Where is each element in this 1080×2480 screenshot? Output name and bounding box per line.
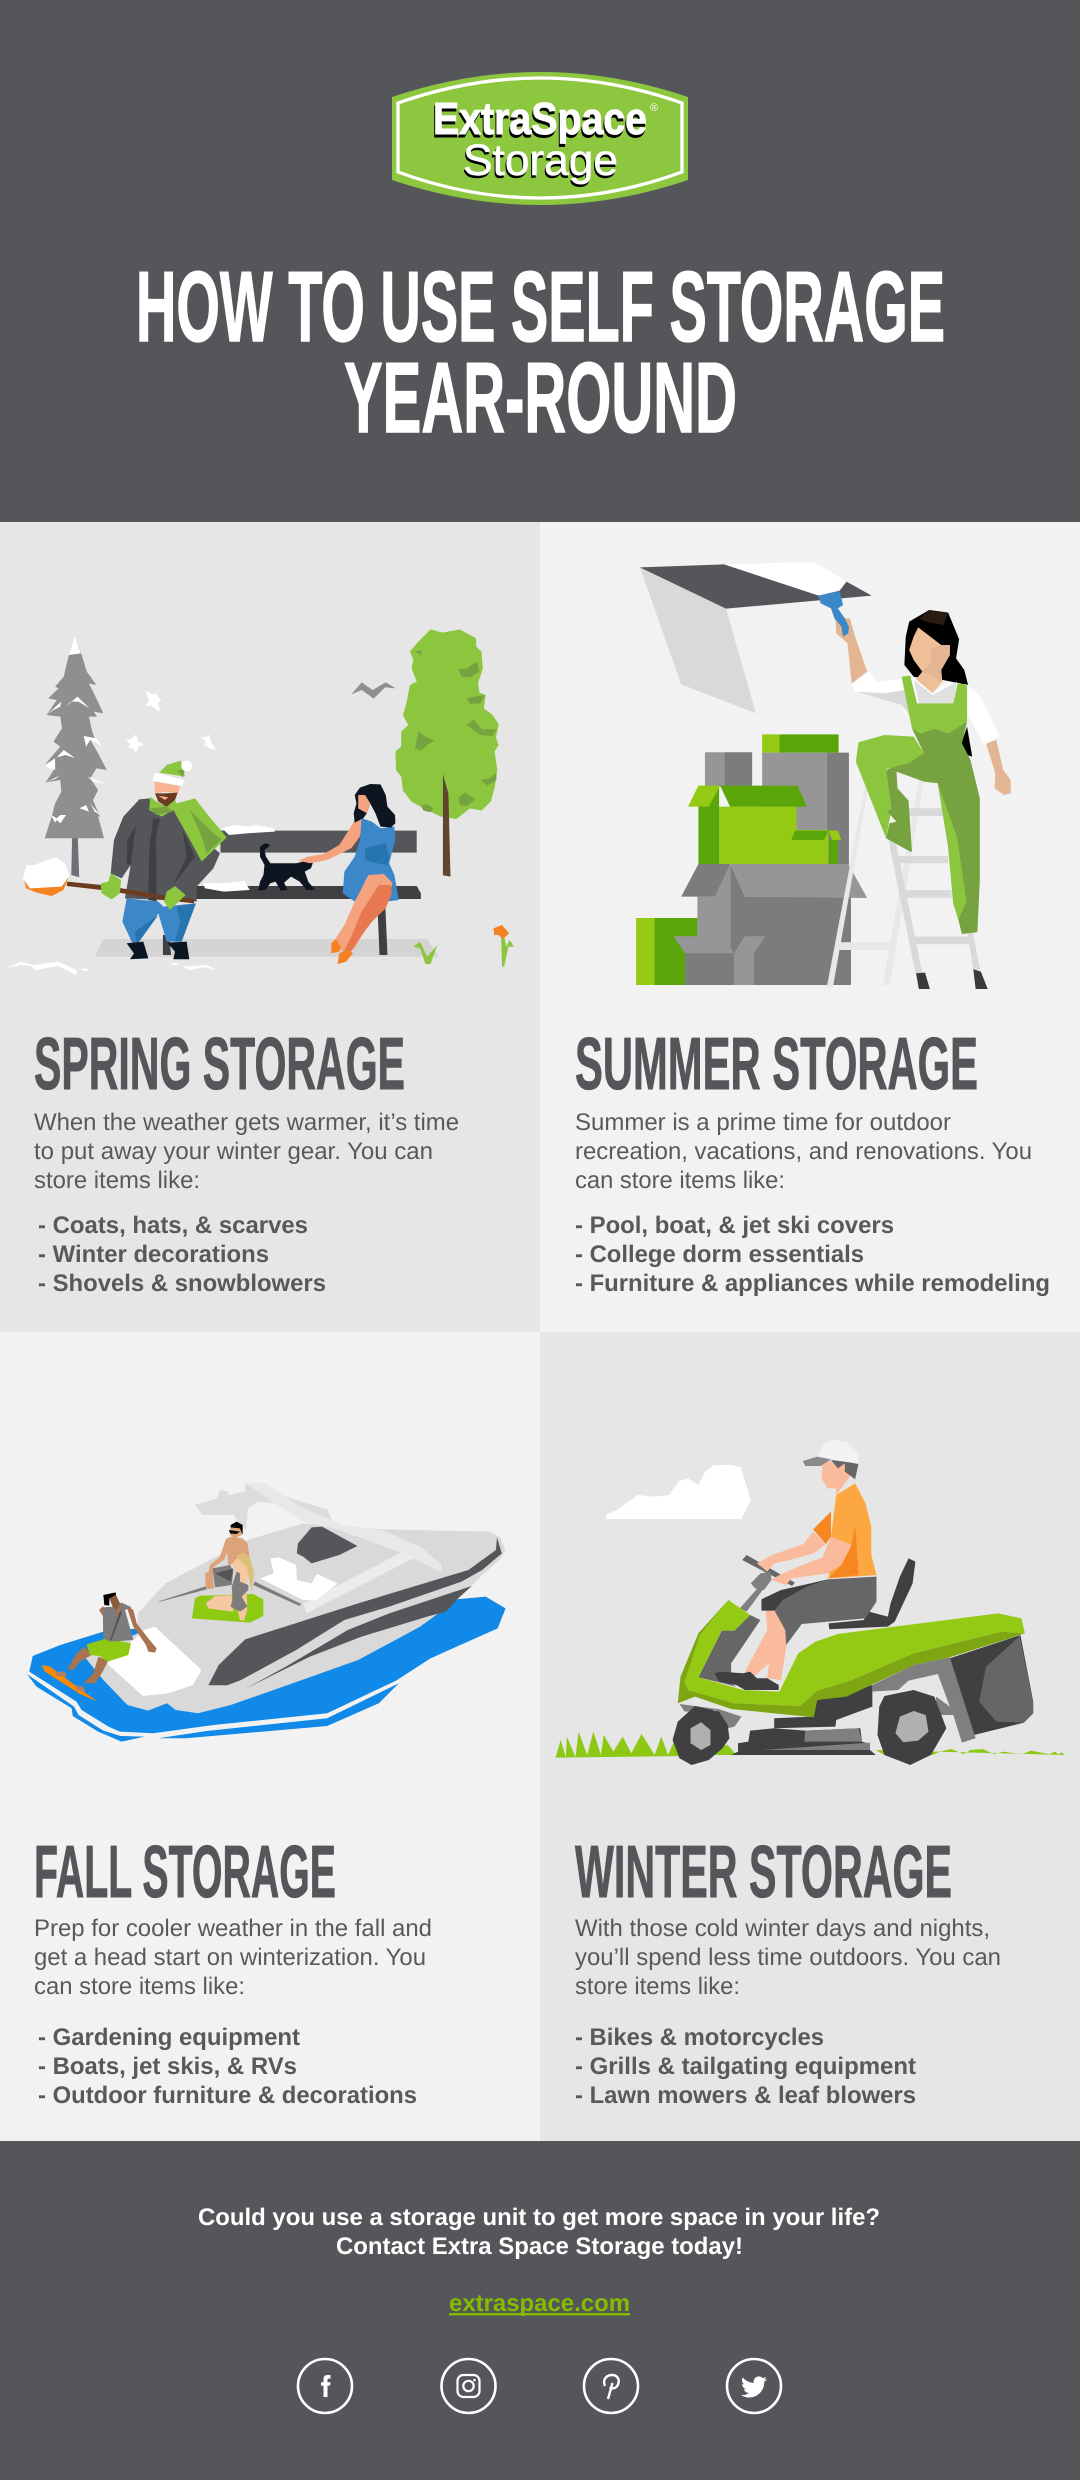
text block: summer intro: recreation, vacations, and renovations. You xyxy=(575,1138,1032,1165)
text block: winter intro xyxy=(575,1915,1001,2000)
text block: summer intro: Summer is a prime time for outdoor xyxy=(575,1109,951,1136)
call to action text: Contact Extra Space Storage today! xyxy=(336,2233,743,2260)
text block: fall intro: get a head start on winterization. You xyxy=(34,1944,426,1971)
icon: pine tree xyxy=(45,636,107,877)
text block: summer intro xyxy=(575,1109,1032,1194)
text block: spring intro: to put away your winter gear. You can xyxy=(34,1138,433,1165)
list: fall items xyxy=(38,2024,417,2109)
logo: Extra Space Storage xyxy=(392,72,688,205)
snow on the ground xyxy=(8,962,217,975)
mower xyxy=(673,1558,1033,1765)
illustration: man on riding lawn mower xyxy=(555,1440,1065,1765)
icon: paint scraper xyxy=(818,591,849,637)
list: spring items xyxy=(38,1212,326,1297)
call to action text: Could you use a storage unit to get more space in your life? xyxy=(198,2204,880,2231)
text block: spring intro: store items like: xyxy=(34,1167,200,1194)
list: summer items xyxy=(575,1212,1050,1297)
rider xyxy=(715,1440,876,1690)
list: fall items: - Gardening equipment xyxy=(38,2024,300,2051)
icon: bird xyxy=(351,682,396,699)
logo: Extra Space Storage: ExtraSpace xyxy=(432,96,646,147)
illustration: woman painting ceiling on a ladder beside boxes xyxy=(636,562,1011,989)
list: winter items: - Lawn mowers & leaf blowers xyxy=(575,2082,916,2109)
header panel xyxy=(0,0,1080,522)
icon: facebook xyxy=(298,2359,352,2413)
panel: footer call to action xyxy=(0,2141,1080,2480)
icon: pinterest xyxy=(584,2359,638,2413)
text block: spring intro xyxy=(34,1109,459,1194)
title xyxy=(136,251,945,454)
icon: twitter xyxy=(727,2359,781,2413)
panel: winter storage xyxy=(540,1332,1080,2141)
couple on green towel xyxy=(192,1522,263,1623)
panel: summer storage xyxy=(540,522,1080,1332)
text block: winter intro: you’ll spend less time outdoors. You can xyxy=(575,1944,1001,1971)
icon: grass and flower xyxy=(413,925,514,967)
list: spring items: - Coats, hats, & scarves xyxy=(38,1212,308,1239)
logo: Extra Space Storage: ® xyxy=(650,102,658,114)
list: winter items: - Grills & tailgating equipment xyxy=(575,2053,916,2080)
woman in blue dress xyxy=(298,784,399,964)
icon: snowflakes xyxy=(126,691,216,753)
illustration: boat and wakeboarder on water xyxy=(27,1483,506,1742)
bench xyxy=(163,825,421,955)
text block: summer intro: can store items like: xyxy=(575,1167,785,1194)
man with shovel xyxy=(23,761,227,959)
text block: winter intro: With those cold winter days and nights, xyxy=(575,1915,990,1942)
text block: fall intro: Prep for cooler weather in the fall and xyxy=(34,1915,432,1942)
list: winter items xyxy=(575,2024,916,2109)
icon: leafy tree xyxy=(395,629,499,877)
icon: instagram xyxy=(442,2359,496,2413)
logo: Extra Space Storage: Storage xyxy=(463,136,618,185)
heading: spring storage: SPRING STORAGE xyxy=(34,1022,405,1105)
ceiling and wall corner xyxy=(640,562,872,713)
panel: spring storage xyxy=(0,522,540,1332)
list: fall items: - Boats, jet skis, & RVs xyxy=(38,2053,297,2080)
boat hull xyxy=(84,1483,506,1713)
call to action text xyxy=(198,2204,880,2260)
text block: fall intro: can store items like: xyxy=(34,1973,245,2000)
list: summer items: - College dorm essentials xyxy=(575,1241,864,1268)
list: summer items: - Pool, boat, & jet ski covers xyxy=(575,1212,894,1239)
list: spring items: - Winter decorations xyxy=(38,1241,269,1268)
logo: Extra Space Storage: Storage xyxy=(462,138,617,188)
text block: fall intro xyxy=(34,1915,432,2000)
water xyxy=(27,1597,506,1742)
stacked boxes xyxy=(636,734,867,985)
woman in green overalls xyxy=(835,610,1011,934)
icon: black cat xyxy=(258,843,315,891)
website link: extraspace.com xyxy=(449,2290,630,2317)
icon: cloud xyxy=(605,1465,751,1519)
list: fall items: - Outdoor furniture & decorations xyxy=(38,2082,417,2109)
heading: fall storage: FALL STORAGE xyxy=(34,1830,336,1913)
text block: winter intro: store items like: xyxy=(575,1973,740,2000)
text block: spring intro: When the weather gets warmer, it’s time xyxy=(34,1109,459,1136)
list: summer items: - Furniture & appliances while remodeling xyxy=(575,1270,1050,1297)
list: winter items: - Bikes & motorcycles xyxy=(575,2024,824,2051)
grass xyxy=(555,1732,1065,1758)
logo: Extra Space Storage: ExtraSpace xyxy=(433,93,647,144)
wakeboarder xyxy=(42,1592,157,1702)
title: YEAR-ROUND xyxy=(344,342,737,454)
list: spring items: - Shovels & snowblowers xyxy=(38,1270,326,1297)
panel: fall storage xyxy=(0,1332,540,2141)
ladder xyxy=(827,780,988,989)
illustration: man shoveling snow and woman on a bench with cat xyxy=(8,629,514,975)
